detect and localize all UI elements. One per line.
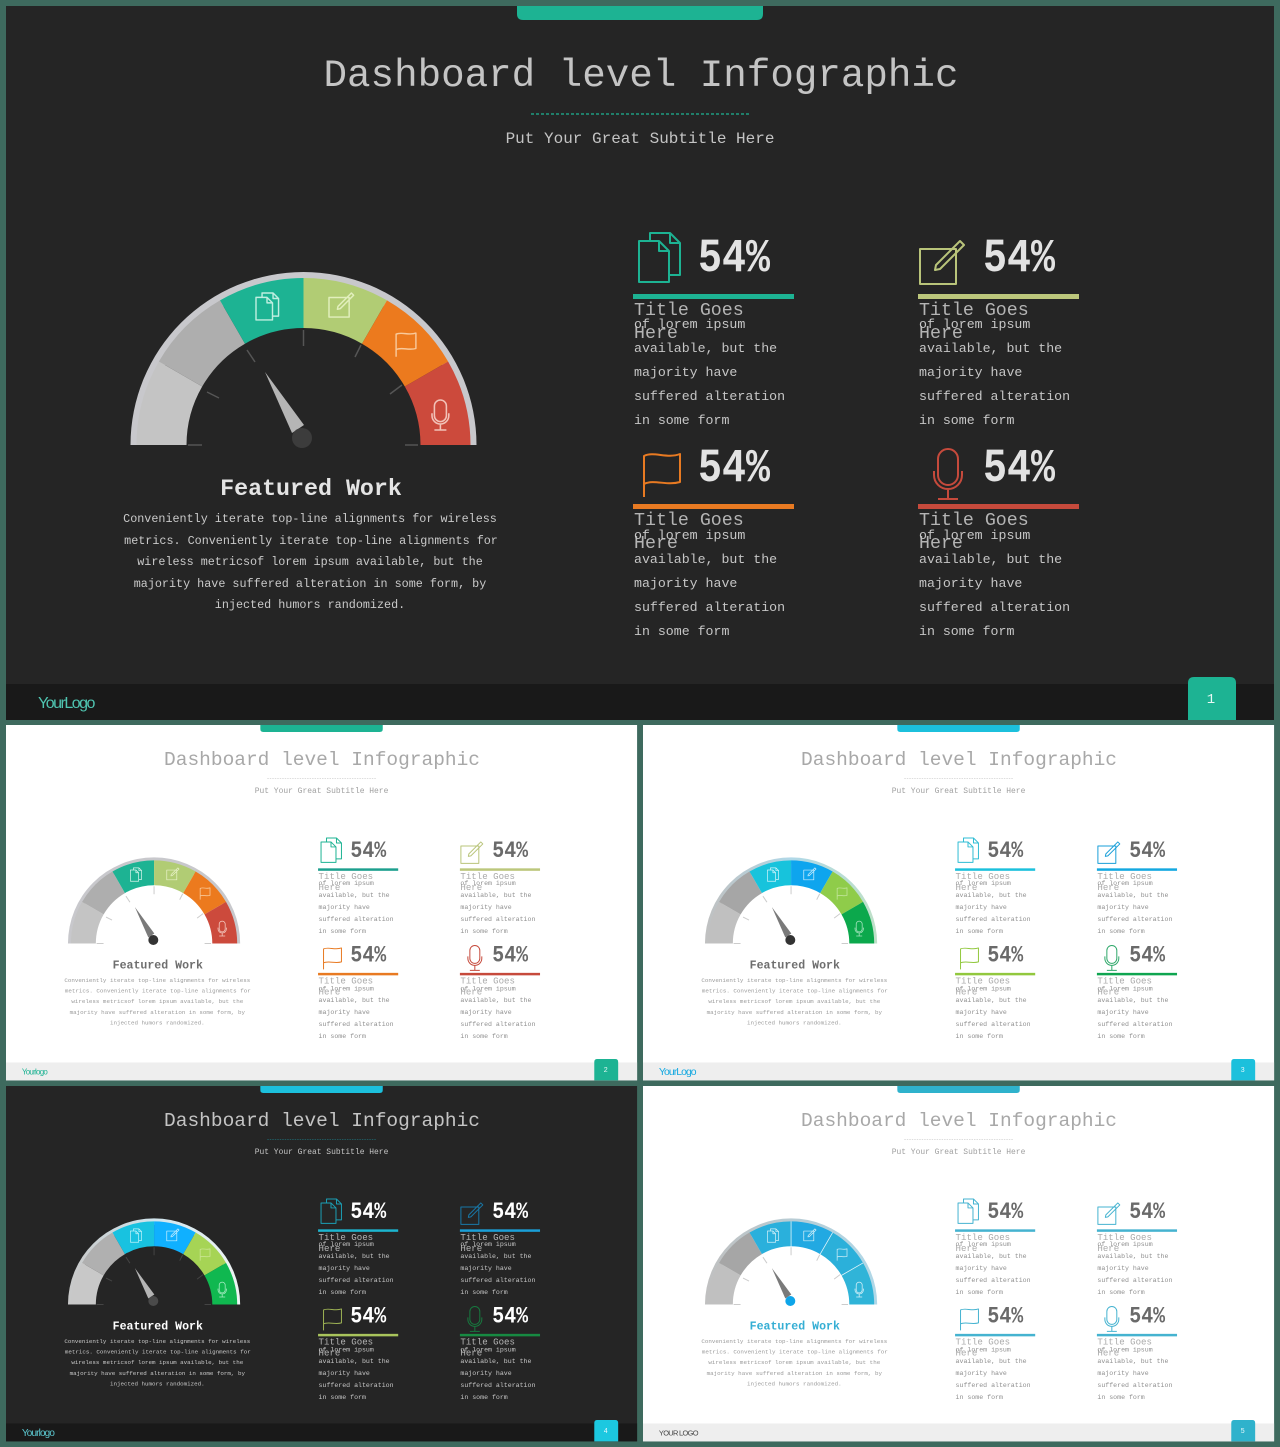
stat card: flag: Here xyxy=(956,1348,977,1359)
stat card: edit: in some form xyxy=(919,413,1014,428)
stat card: flag: available, but the xyxy=(319,997,390,1004)
stat card: microphone: available, but the xyxy=(919,552,1062,567)
stat card: microphone: in some form xyxy=(1097,1394,1145,1401)
stat card: microphone xyxy=(918,443,1079,639)
stat card: microphone: majority have xyxy=(919,576,1022,591)
stat card: microphone: Here xyxy=(460,1348,482,1359)
subtitle: Put Your Great Subtitle Here xyxy=(255,787,389,796)
description: majority have suffered alteration in some form, by xyxy=(70,1370,245,1377)
stat card: documents: 54% xyxy=(987,839,1024,865)
stat card: microphone: in some form xyxy=(1097,1033,1145,1040)
stat card: edit xyxy=(460,839,540,935)
description: injected humors randomized. xyxy=(110,1381,205,1388)
stat card: documents: available, but the xyxy=(319,892,390,899)
stat card: microphone: of lorem ipsum xyxy=(460,985,516,992)
description: metrics. Conveniently iterate top-line alignments for xyxy=(65,1349,251,1356)
stat card: microphone xyxy=(1097,943,1177,1040)
stat card: edit: of lorem ipsum xyxy=(460,880,516,887)
icon: documents xyxy=(767,1229,779,1242)
title: Dashboard level Infographic xyxy=(801,1110,1117,1132)
stat card: edit: 54% xyxy=(492,839,529,865)
stat card: microphone: in some form xyxy=(460,1033,508,1040)
stat card: documents: Here xyxy=(634,324,678,344)
stat card: microphone: available, but the xyxy=(460,1358,532,1365)
stat card: edit: suffered alteration xyxy=(919,389,1070,404)
footer xyxy=(643,1059,1274,1080)
stat card: documents: in some form xyxy=(319,1289,366,1296)
description: majority have suffered alteration in some form, by xyxy=(134,577,486,591)
stat card: microphone: majority have xyxy=(1097,1370,1149,1377)
stat card: documents: majority have xyxy=(634,365,737,380)
icon: microphone xyxy=(432,400,449,430)
stat card: edit: suffered alteration xyxy=(460,1277,535,1284)
stat card: documents: available, but the xyxy=(956,1253,1027,1260)
stat card: flag: of lorem ipsum xyxy=(956,985,1011,992)
panel: light slide, blue monochrome xyxy=(643,1086,1274,1441)
slide background xyxy=(6,1086,637,1441)
description: wireless metricsof lorem ipsum available, but the xyxy=(708,998,881,1005)
stat card: documents: Here xyxy=(956,882,977,893)
top tab xyxy=(897,1086,1020,1093)
icon: documents xyxy=(767,868,779,881)
stat card: documents: suffered alteration xyxy=(956,916,1031,923)
stat card: documents: of lorem ipsum xyxy=(956,880,1011,887)
stat card: flag: of lorem ipsum xyxy=(319,985,374,992)
stat card: flag xyxy=(318,943,398,1040)
icon: documents xyxy=(130,1229,142,1242)
stat card: documents: in some form xyxy=(319,928,366,935)
stat card: documents: majority have xyxy=(319,904,370,911)
stat card: flag: suffered alteration xyxy=(634,600,785,615)
description: metrics. Conveniently iterate top-line alignments for xyxy=(65,988,251,995)
stat card: edit: Here xyxy=(460,882,482,893)
panel: light slide, cool colors xyxy=(643,725,1274,1080)
description: injected humors randomized. xyxy=(747,1381,842,1388)
gauge needle xyxy=(135,1268,158,1306)
title: Dashboard level Infographic xyxy=(164,749,480,771)
icon: flag xyxy=(200,888,210,900)
stat card: flag: available, but the xyxy=(956,997,1027,1004)
stat card: documents: suffered alteration xyxy=(319,1277,394,1284)
icon: flag xyxy=(200,1249,210,1261)
stat card: edit: in some form xyxy=(460,928,508,935)
panel: dark slide, cool colors xyxy=(6,1086,637,1441)
stat card: edit: suffered alteration xyxy=(1097,916,1172,923)
stat card: documents xyxy=(318,1199,398,1296)
stat card: microphone: 54% xyxy=(492,1304,529,1330)
stat card: documents: Title Goes xyxy=(319,871,373,882)
stat card: documents: majority have xyxy=(319,1265,370,1272)
description: majority have suffered alteration in some form, by xyxy=(707,1370,882,1377)
stat card: edit: of lorem ipsum xyxy=(1097,1241,1153,1248)
panel: light slide, warm colors xyxy=(6,725,637,1080)
stat card: flag: majority have xyxy=(319,1370,370,1377)
icon: microphone xyxy=(855,1282,863,1297)
stat card: flag: Title Goes xyxy=(634,511,744,531)
description: Conveniently iterate top-line alignments for wireless xyxy=(64,977,251,984)
title divider xyxy=(267,1139,376,1141)
stat card: microphone: Here xyxy=(1097,987,1119,998)
gauge needle xyxy=(265,372,312,448)
stat card: documents: of lorem ipsum xyxy=(634,317,745,332)
stat card: documents: of lorem ipsum xyxy=(319,880,374,887)
stat card: flag: Here xyxy=(634,534,678,554)
stat card: microphone: majority have xyxy=(1097,1009,1149,1016)
stat card: microphone: suffered alteration xyxy=(1097,1382,1172,1389)
stat card: microphone: 54% xyxy=(983,443,1056,496)
stat card: documents: of lorem ipsum xyxy=(956,1241,1011,1248)
stat card: microphone: Title Goes xyxy=(1097,1336,1152,1347)
stat card: microphone: Here xyxy=(919,534,963,554)
stat card: documents: available, but the xyxy=(956,892,1027,899)
stat card: flag: in some form xyxy=(319,1394,366,1401)
footer: Yourlogo xyxy=(22,1428,55,1439)
stat card: edit xyxy=(460,1200,540,1296)
footer: 1 xyxy=(1207,692,1215,708)
stat card: documents xyxy=(318,838,398,935)
panel: main dark slide xyxy=(6,6,1274,720)
stat card: flag xyxy=(318,1304,398,1401)
stat card: edit xyxy=(918,233,1079,428)
stat card: edit: in some form xyxy=(1097,1289,1145,1296)
top tab xyxy=(260,725,383,732)
stat card: edit: Title Goes xyxy=(460,1232,515,1243)
stat card: edit: Title Goes xyxy=(1097,871,1152,882)
stat card: edit: Title Goes xyxy=(919,301,1029,321)
icon: flag xyxy=(837,1249,847,1261)
stat card: flag: of lorem ipsum xyxy=(634,528,745,543)
stat card: flag: majority have xyxy=(319,1009,370,1016)
slide background xyxy=(643,725,1274,1080)
description: metrics. Conveniently iterate top-line alignments for xyxy=(702,988,888,995)
stat card: microphone: Here xyxy=(1097,1348,1119,1359)
gauge chart xyxy=(705,1218,877,1306)
stat card: edit: Here xyxy=(919,324,963,344)
stat card: microphone: available, but the xyxy=(1097,997,1169,1004)
slide background xyxy=(643,1086,1274,1441)
stat card: edit: majority have xyxy=(919,365,1022,380)
stat card: documents: 54% xyxy=(698,233,771,286)
description: Conveniently iterate top-line alignments for wireless xyxy=(123,512,497,526)
heading: featured work: Featured Work xyxy=(113,959,203,972)
icon: edit xyxy=(167,1229,179,1241)
stat card: edit: majority have xyxy=(1097,904,1149,911)
icon: documents xyxy=(130,868,142,881)
gauge chart xyxy=(705,857,877,945)
stat card: edit: majority have xyxy=(460,904,512,911)
stat card: microphone: suffered alteration xyxy=(1097,1021,1172,1028)
stat card: edit: of lorem ipsum xyxy=(919,317,1030,332)
stat card: flag: 54% xyxy=(350,1304,387,1330)
subtitle: Put Your Great Subtitle Here xyxy=(892,787,1026,796)
stat card: edit: majority have xyxy=(460,1265,512,1272)
top tab xyxy=(517,6,763,20)
stat card: edit: suffered alteration xyxy=(1097,1277,1172,1284)
footer xyxy=(643,1420,1274,1441)
stat card: flag: 54% xyxy=(350,943,387,969)
top tab xyxy=(260,1086,383,1093)
stat card: microphone xyxy=(1097,1304,1177,1401)
stat card: edit: available, but the xyxy=(460,1253,532,1260)
icon: microphone xyxy=(218,1282,226,1297)
description: injected humors randomized. xyxy=(747,1020,842,1027)
stat card: microphone: Title Goes xyxy=(460,975,515,986)
stat card: microphone xyxy=(460,943,540,1040)
stat card: edit: Here xyxy=(460,1243,482,1254)
stat card: microphone: Title Goes xyxy=(460,1336,515,1347)
gauge needle xyxy=(135,907,158,945)
stat card: edit: in some form xyxy=(460,1289,508,1296)
stat card: microphone: suffered alteration xyxy=(460,1021,535,1028)
stat card: flag: Title Goes xyxy=(956,975,1010,986)
stat card: flag: majority have xyxy=(634,576,737,591)
slide background xyxy=(6,725,637,1080)
description: metrics. Conveniently iterate top-line alignments for xyxy=(702,1349,888,1356)
stat card: microphone: suffered alteration xyxy=(919,600,1070,615)
stat card: documents: suffered alteration xyxy=(319,916,394,923)
stat card: microphone: 54% xyxy=(492,943,529,969)
footer: YourLogo xyxy=(38,695,96,712)
stat card: documents xyxy=(955,838,1035,935)
stat card: flag: of lorem ipsum xyxy=(956,1346,1011,1353)
stat card: flag: in some form xyxy=(319,1033,366,1040)
gauge needle xyxy=(772,1268,795,1306)
gauge chart xyxy=(130,272,476,448)
stat card: flag: suffered alteration xyxy=(319,1021,394,1028)
stat card: documents: Title Goes xyxy=(956,1232,1010,1243)
icon: microphone xyxy=(855,921,863,936)
stat card: documents: majority have xyxy=(956,904,1007,911)
stat card: documents: Here xyxy=(319,1243,340,1254)
footer: YourLogo xyxy=(659,1067,697,1078)
stat card: flag: Title Goes xyxy=(319,975,373,986)
stat card: documents: 54% xyxy=(987,1200,1024,1226)
stat card: microphone: in some form xyxy=(919,624,1014,639)
stat card: edit: Title Goes xyxy=(460,871,515,882)
stat card: documents: of lorem ipsum xyxy=(319,1241,374,1248)
stat card: flag: of lorem ipsum xyxy=(319,1346,374,1353)
stat card: edit: available, but the xyxy=(919,341,1062,356)
description: wireless metricsof lorem ipsum available, but the xyxy=(71,1359,244,1366)
stat card: microphone: in some form xyxy=(460,1394,508,1401)
title divider xyxy=(904,778,1013,780)
heading: featured work: Featured Work xyxy=(750,1320,840,1333)
stat card: documents: in some form xyxy=(634,413,729,428)
subtitle: Put Your Great Subtitle Here xyxy=(892,1148,1026,1157)
description: majority have suffered alteration in some form, by xyxy=(707,1009,882,1016)
stat card: flag: 54% xyxy=(987,1304,1024,1330)
footer: 3 xyxy=(1241,1067,1245,1075)
stat card: documents: Title Goes xyxy=(319,1232,373,1243)
stat card: edit: majority have xyxy=(1097,1265,1149,1272)
description: wireless metricsof lorem ipsum available, but the xyxy=(71,998,244,1005)
description: wireless metricsof lorem ipsum available, but the xyxy=(137,555,483,569)
subtitle: Put Your Great Subtitle Here xyxy=(255,1148,389,1157)
footer: YOUR LOGO xyxy=(659,1428,699,1437)
stat card: documents: 54% xyxy=(350,1200,387,1226)
icon: microphone xyxy=(218,921,226,936)
title: Dashboard level Infographic xyxy=(164,1110,480,1132)
stat card: flag: in some form xyxy=(956,1033,1003,1040)
footer: 2 xyxy=(604,1067,608,1075)
stat card: flag: suffered alteration xyxy=(956,1021,1031,1028)
stat card: flag: Title Goes xyxy=(956,1336,1010,1347)
stat card: flag: 54% xyxy=(698,443,771,496)
description: Conveniently iterate top-line alignments for wireless xyxy=(701,1338,888,1345)
footer xyxy=(6,677,1274,720)
icon: edit xyxy=(167,868,179,880)
stat card: edit: 54% xyxy=(983,233,1056,286)
stat card: flag: Title Goes xyxy=(319,1336,373,1347)
icon: documents xyxy=(256,293,279,320)
description: Conveniently iterate top-line alignments for wireless xyxy=(701,977,888,984)
stat card: documents: Title Goes xyxy=(956,871,1010,882)
stat card: flag: in some form xyxy=(956,1394,1003,1401)
stat card: flag xyxy=(955,1304,1035,1401)
stat card: edit xyxy=(1097,839,1177,935)
stat card: microphone: 54% xyxy=(1129,943,1166,969)
stat card: flag: Here xyxy=(956,987,977,998)
stat card: edit: of lorem ipsum xyxy=(460,1241,516,1248)
description: metrics. Conveniently iterate top-line alignments for xyxy=(124,534,498,548)
stat card: edit: Title Goes xyxy=(1097,1232,1152,1243)
stat card: microphone: available, but the xyxy=(460,997,532,1004)
icon: edit xyxy=(804,1229,816,1241)
stat card: edit: suffered alteration xyxy=(460,916,535,923)
stat card: edit xyxy=(1097,1200,1177,1296)
stat card: documents: 54% xyxy=(350,839,387,865)
title: Dashboard level Infographic xyxy=(801,749,1117,771)
stat card: microphone: majority have xyxy=(460,1370,512,1377)
stat card: flag: majority have xyxy=(956,1370,1007,1377)
stat card: microphone: of lorem ipsum xyxy=(1097,1346,1153,1353)
icon: edit xyxy=(329,293,354,317)
footer: Yourlogo xyxy=(22,1067,48,1076)
stat card: documents: Here xyxy=(319,882,340,893)
footer xyxy=(6,1059,637,1080)
stat card: documents xyxy=(955,1199,1035,1296)
stat card: edit: 54% xyxy=(1129,839,1166,865)
gauge chart xyxy=(68,1218,240,1306)
stat card: flag: Here xyxy=(319,987,340,998)
stat card: flag: in some form xyxy=(634,624,729,639)
stat card: flag: suffered alteration xyxy=(319,1382,394,1389)
stat card: microphone: of lorem ipsum xyxy=(1097,985,1153,992)
title: Dashboard level Infographic xyxy=(324,53,958,98)
stat card: microphone: Here xyxy=(460,987,482,998)
description: Conveniently iterate top-line alignments for wireless xyxy=(64,1338,251,1345)
stat card: microphone xyxy=(460,1304,540,1401)
stat card: microphone: 54% xyxy=(1129,1304,1166,1330)
stat card: edit: Here xyxy=(1097,1243,1119,1254)
stat card: flag: suffered alteration xyxy=(956,1382,1031,1389)
slide background xyxy=(6,6,1274,720)
description: majority have suffered alteration in some form, by xyxy=(70,1009,245,1016)
description: injected humors randomized. xyxy=(110,1020,205,1027)
stat card: flag: available, but the xyxy=(634,552,777,567)
icon: flag xyxy=(396,333,416,357)
description: injected humors randomized. xyxy=(215,598,405,612)
title divider xyxy=(904,1139,1013,1141)
gauge chart xyxy=(68,857,240,945)
stat card: documents xyxy=(633,233,794,428)
stat card: documents: in some form xyxy=(956,928,1003,935)
stat card: edit: available, but the xyxy=(1097,1253,1169,1260)
stat card: microphone: Title Goes xyxy=(1097,975,1152,986)
title divider xyxy=(531,113,749,115)
footer xyxy=(6,1420,637,1441)
stat card: edit: Here xyxy=(1097,882,1119,893)
stat card: microphone: of lorem ipsum xyxy=(460,1346,516,1353)
stat card: documents: in some form xyxy=(956,1289,1003,1296)
heading: featured work: Featured Work xyxy=(750,959,840,972)
stat card: edit: available, but the xyxy=(460,892,532,899)
stat card: documents: available, but the xyxy=(319,1253,390,1260)
stat card: documents: Here xyxy=(956,1243,977,1254)
icon: edit xyxy=(804,868,816,880)
description: wireless metricsof lorem ipsum available, but the xyxy=(708,1359,881,1366)
stat card: edit: in some form xyxy=(1097,928,1145,935)
stat card: documents: suffered alteration xyxy=(956,1277,1031,1284)
footer: 4 xyxy=(604,1428,608,1436)
stat card: flag: 54% xyxy=(987,943,1024,969)
stat card: flag: available, but the xyxy=(956,1358,1027,1365)
stat card: microphone: suffered alteration xyxy=(460,1382,535,1389)
gauge needle xyxy=(772,907,795,945)
stat card: flag: Here xyxy=(319,1348,340,1359)
footer: 5 xyxy=(1241,1428,1245,1436)
stat card: edit: 54% xyxy=(1129,1200,1166,1226)
stat card: microphone: Title Goes xyxy=(919,511,1029,531)
icon: flag xyxy=(837,888,847,900)
stat card: flag: majority have xyxy=(956,1009,1007,1016)
stat card: documents: suffered alteration xyxy=(634,389,785,404)
stat card: edit: 54% xyxy=(492,1200,529,1226)
stat card: documents: majority have xyxy=(956,1265,1007,1272)
stat card: flag: available, but the xyxy=(319,1358,390,1365)
stat card: microphone: majority have xyxy=(460,1009,512,1016)
heading: featured work: Featured Work xyxy=(113,1320,203,1333)
stat card: documents: Title Goes xyxy=(634,301,744,321)
stat card: edit: of lorem ipsum xyxy=(1097,880,1153,887)
stat card: documents: available, but the xyxy=(634,341,777,356)
stat card: flag xyxy=(955,943,1035,1040)
title divider xyxy=(267,778,376,780)
heading: featured work: Featured Work xyxy=(220,476,402,502)
subtitle: Put Your Great Subtitle Here xyxy=(506,130,774,148)
stat card: microphone: of lorem ipsum xyxy=(919,528,1030,543)
stat card: flag xyxy=(633,443,794,639)
stat card: edit: available, but the xyxy=(1097,892,1169,899)
stat card: microphone: available, but the xyxy=(1097,1358,1169,1365)
top tab xyxy=(897,725,1020,732)
